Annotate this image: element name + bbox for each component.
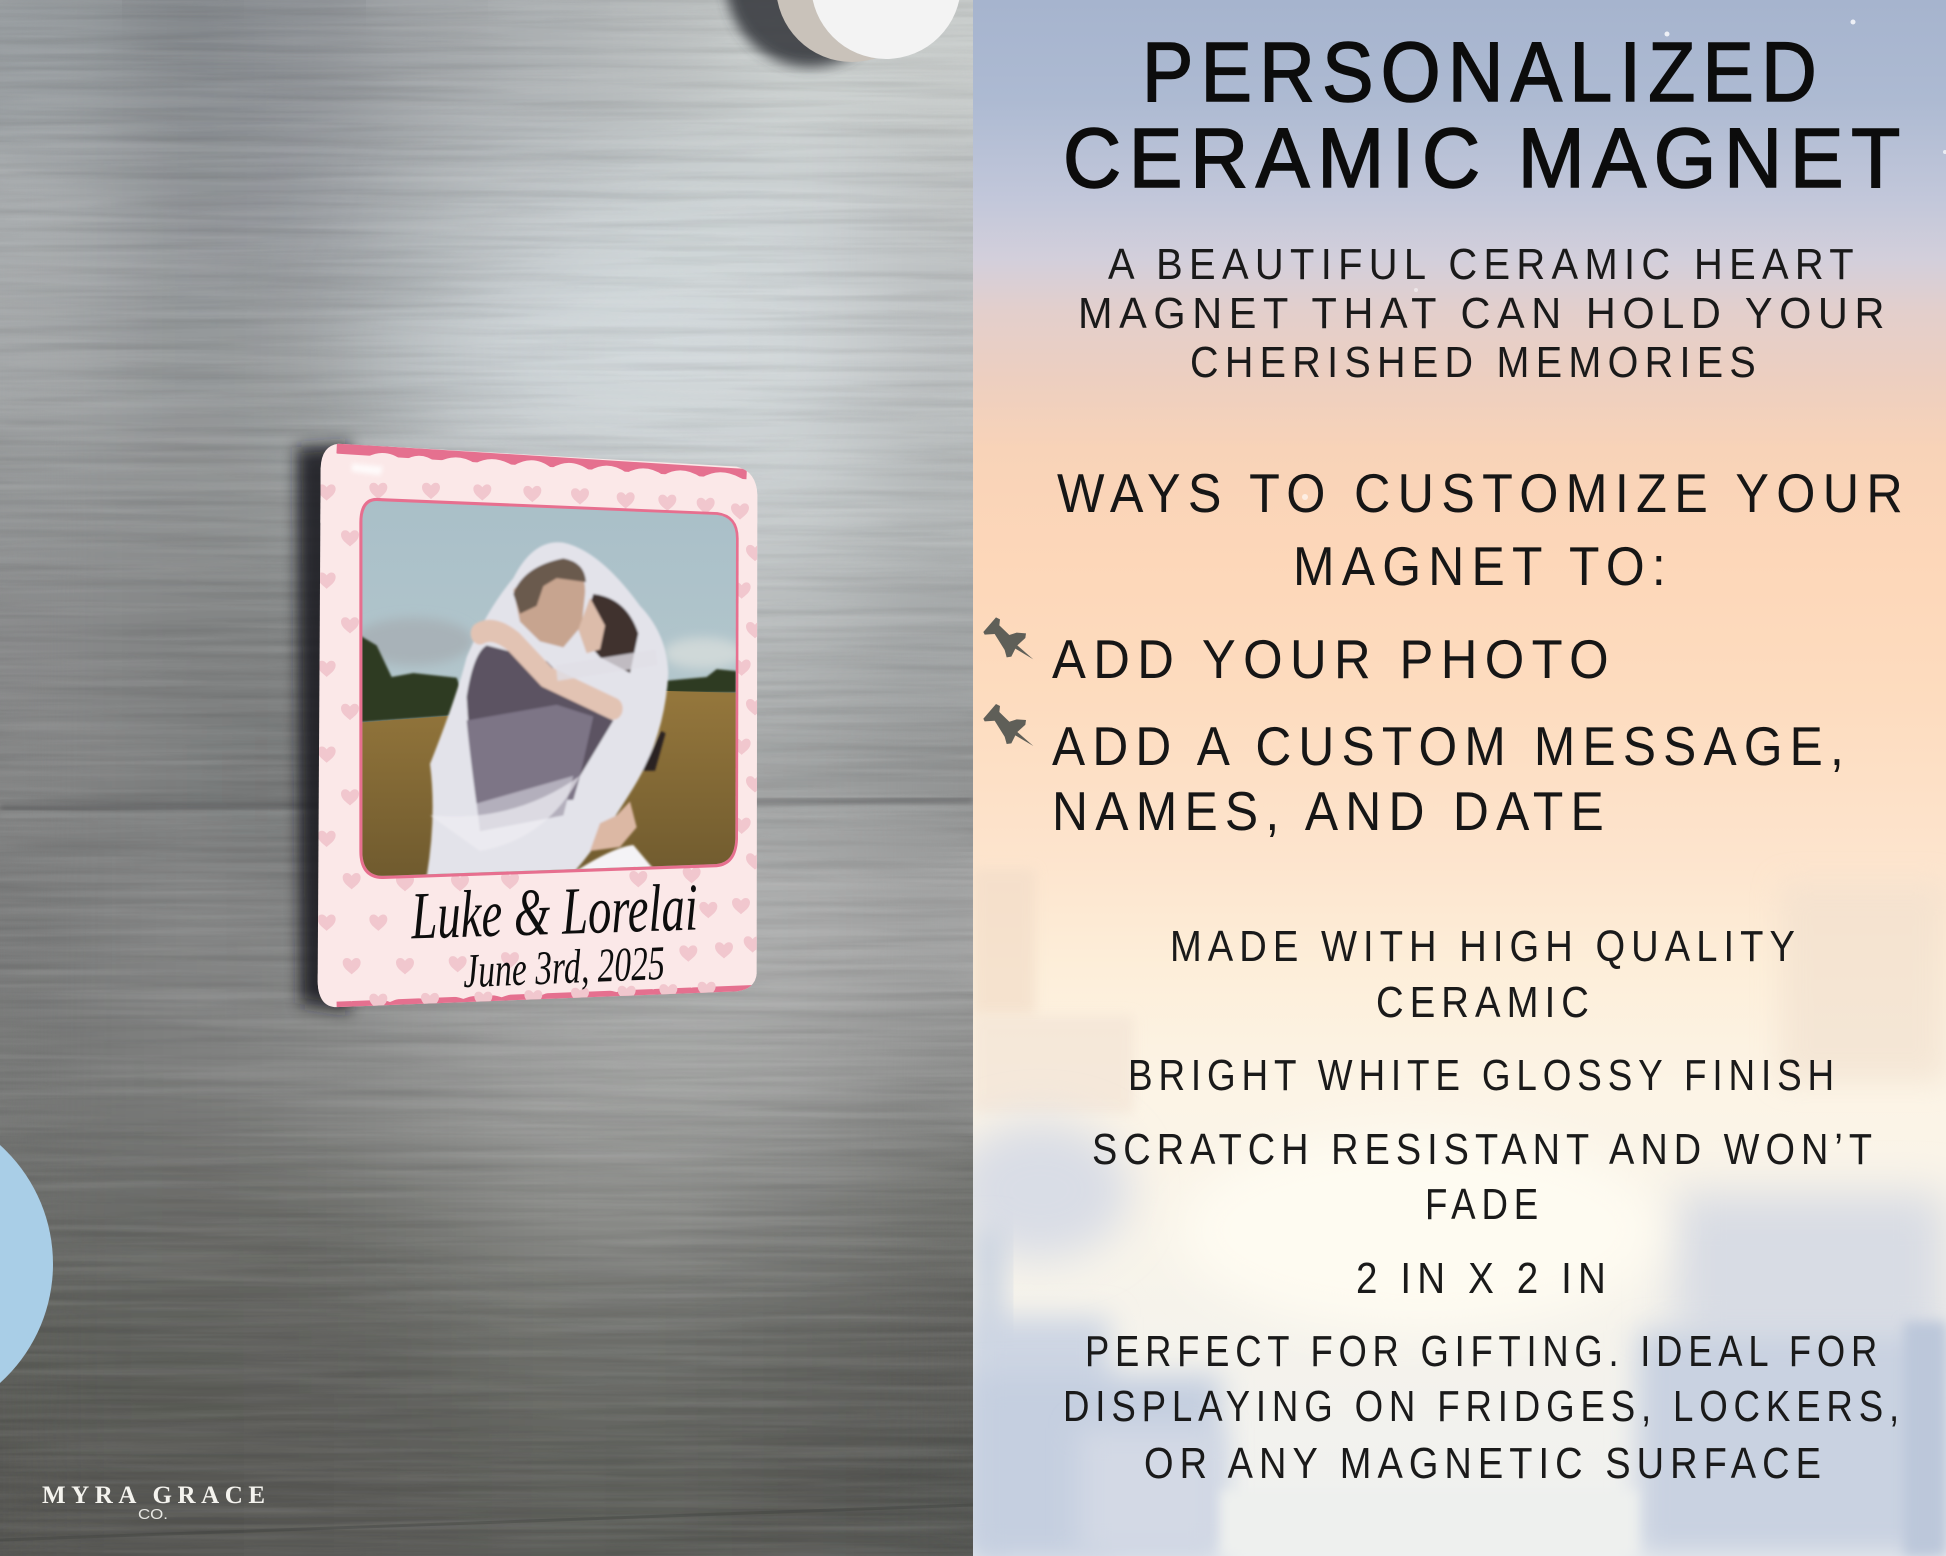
tile surface pattern and borders <box>317 448 764 1010</box>
date text: June 3rd, 2025 <box>462 936 666 998</box>
product: ceramic photo magnet <box>297 444 764 1011</box>
features list: 2 IN X 2 IN <box>1356 1254 1612 1303</box>
logo: Myra Grace Co. <box>42 1482 265 1523</box>
magnet tile <box>318 444 757 1007</box>
groom suit <box>465 644 614 776</box>
bridal gown <box>576 844 653 869</box>
bridal veil <box>427 542 668 877</box>
icon: white magnet peg at top <box>726 0 961 67</box>
features list: OR ANY MAGNETIC SURFACE <box>1144 1439 1827 1488</box>
treeline <box>360 635 737 722</box>
features list: CERAMIC <box>1376 978 1595 1027</box>
scalloped pink border bottom <box>317 974 760 1006</box>
features list <box>1063 922 1905 1488</box>
names text: Luke & Lorelai <box>410 871 699 954</box>
subtitle: MAGNET THAT CAN HOLD YOUR <box>1078 289 1891 338</box>
logo: Myra Grace Co.: MYRA GRACE <box>42 1482 265 1509</box>
features list: MADE WITH HIGH QUALITY <box>1170 922 1801 971</box>
list item: add a custom message: NAMES, AND DATE <box>1052 780 1611 842</box>
title: CERAMIC MAGNET <box>1063 111 1908 205</box>
wedding photo <box>353 497 743 881</box>
list item: add a custom message: ADD A CUSTOM MESSAGE, <box>1052 715 1851 777</box>
list item: add your photo: ADD YOUR PHOTO <box>1052 628 1616 690</box>
magnet drop shadow <box>297 444 350 1011</box>
subtitle: CHERISHED MEMORIES <box>1190 338 1762 387</box>
list item: add a custom message <box>1052 715 1851 842</box>
panel: sunset sky background <box>950 0 1946 1556</box>
logo: Myra Grace Co.: CO. <box>138 1506 168 1523</box>
icon: blue magnet at left edge <box>0 1145 53 1383</box>
groom hand and sleeve <box>590 802 637 851</box>
scalloped pink border top <box>317 448 760 523</box>
icon: push pin 1 <box>983 617 1033 659</box>
stars <box>1302 20 1946 500</box>
title <box>1063 25 1908 205</box>
wheat field <box>360 691 737 881</box>
bride head and hair <box>590 592 640 674</box>
subtitle <box>1078 240 1891 387</box>
dark hair below <box>647 732 663 768</box>
groom head <box>512 576 586 648</box>
heading: ways to customize <box>1057 462 1910 597</box>
features list: FADE <box>1425 1180 1544 1229</box>
heading: ways to customize: MAGNET TO: <box>1293 535 1673 597</box>
title: PERSONALIZED <box>1142 25 1824 119</box>
embracing arm <box>480 631 613 709</box>
heart pattern <box>318 483 764 1010</box>
panel: brushed steel fridge door <box>0 0 973 1556</box>
embracing couple under veil <box>427 542 668 877</box>
blurred city skyline <box>950 869 1946 1556</box>
glossy highlights <box>352 463 383 475</box>
subtitle: A BEAUTIFUL CERAMIC HEART <box>1108 240 1860 289</box>
photo frame <box>359 498 739 879</box>
icon: push pin 2 <box>983 704 1033 746</box>
